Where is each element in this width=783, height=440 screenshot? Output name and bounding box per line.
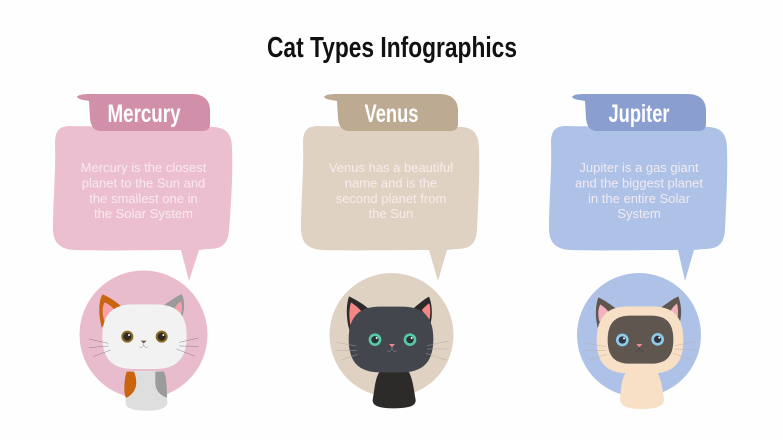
- description: Mercury: the Solar System: [94, 206, 193, 221]
- speech bubble: Mercury: [53, 126, 232, 281]
- panel: Venus: [301, 94, 479, 408]
- circle: Mercury: [80, 270, 208, 398]
- description: Jupiter: and the biggest planet: [575, 176, 703, 190]
- circle: Venus: [330, 273, 454, 397]
- panel: Mercury: [53, 94, 232, 411]
- description: Jupiter: in the entire Solar: [588, 191, 691, 206]
- header label: Mercury: Mercury: [108, 100, 181, 128]
- speech bubble: Jupiter: [549, 126, 727, 281]
- header tab: Jupiter: [572, 94, 706, 131]
- description: Venus: the Sun: [369, 206, 413, 221]
- header label: Jupiter: Jupiter: [608, 100, 670, 128]
- description: Jupiter: Jupiter is a gas giant: [579, 160, 699, 175]
- description: Mercury: planet to the Sun and: [82, 176, 205, 190]
- description: Jupiter: System: [617, 206, 661, 221]
- description: Venus: name and is the: [345, 176, 437, 190]
- header tab: Mercury: [77, 94, 210, 131]
- icon: calico cat: [89, 294, 198, 411]
- description: Mercury: Mercury is the closest: [81, 160, 207, 175]
- speech bubble: Venus: [301, 126, 479, 281]
- circle: Jupiter: [577, 273, 701, 397]
- description: Mercury: the smallest one in: [89, 191, 198, 206]
- header label: Venus: Venus: [364, 100, 418, 128]
- description: Venus: second planet from: [336, 191, 446, 206]
- icon: siamese cat: [584, 296, 695, 409]
- icon: black cat: [337, 296, 448, 408]
- panel: Jupiter: [549, 94, 727, 409]
- description: Venus: Venus has a beautiful: [329, 160, 453, 175]
- title: Cat Types Infographics: [267, 32, 517, 64]
- header tab: Venus: [324, 94, 458, 131]
